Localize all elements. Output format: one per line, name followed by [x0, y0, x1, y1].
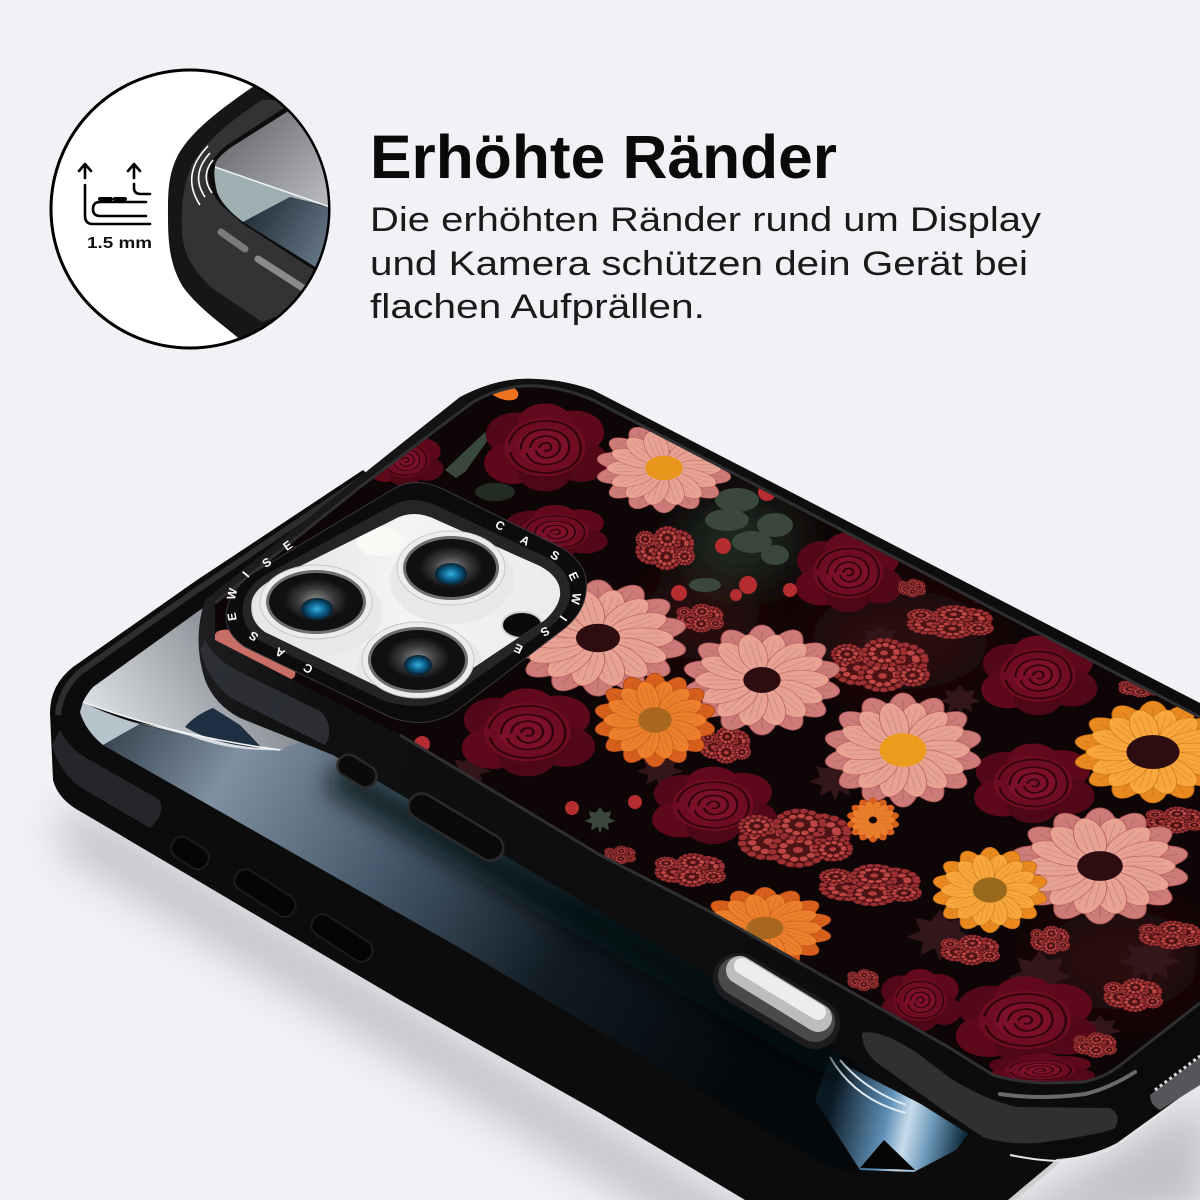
pink petals under camera	[215, 630, 296, 680]
screen dark notch	[185, 708, 262, 748]
daisy: orange left	[592, 673, 718, 767]
daisy: orange bottom	[710, 887, 832, 961]
ring brand lettering: A	[518, 532, 533, 549]
label: 1.5 mm: 1.5 mm	[87, 235, 152, 252]
ring brand lettering: S	[548, 547, 562, 564]
close-up of phone case corner	[168, 86, 328, 338]
roses	[368, 403, 1098, 1087]
daisy: yellow far right	[1072, 700, 1200, 804]
ring brand lettering: S	[538, 623, 552, 640]
description text: Die erhöhten Ränder rund um Display	[370, 201, 1042, 239]
daisy: pink left	[525, 580, 686, 696]
berry clusters	[604, 526, 1200, 1058]
bottom rim highlight	[1010, 1085, 1200, 1161]
right side reflection	[1150, 1057, 1200, 1110]
wallpaper lines and wedge	[830, 1057, 906, 1113]
ring outer	[226, 482, 586, 722]
ring brand lettering: I	[239, 569, 252, 580]
floral print	[200, 370, 1200, 1100]
side button: long two	[307, 910, 377, 966]
ring brand lettering: A	[272, 644, 287, 661]
daisy: small orange	[846, 797, 900, 843]
screen bright wallpaper	[815, 1057, 971, 1172]
camera plate details	[256, 526, 542, 686]
silver strip	[1008, 1159, 1064, 1200]
camera bump	[224, 482, 586, 722]
red berries	[414, 483, 797, 815]
charging port	[738, 966, 818, 1024]
side button: long one	[230, 865, 300, 921]
daisy: pink lower right	[1008, 807, 1192, 925]
back phone screen dark area	[103, 700, 905, 1172]
ring brand lettering: W	[568, 592, 584, 606]
shadow cast on screen by front phone	[333, 775, 840, 1065]
ring brand lettering: W	[224, 586, 241, 601]
corner carbon panel	[52, 730, 161, 828]
front phone side buttons and port	[200, 640, 818, 1024]
ground shadow	[60, 800, 1200, 1200]
ring brand lettering: C	[300, 660, 315, 677]
daisy: orange right	[930, 847, 1050, 933]
ring brand lettering: S	[246, 628, 261, 644]
description text: flachen Aufprällen.	[370, 288, 705, 326]
soft background foliage	[640, 500, 1200, 1010]
title: Erhöhte Ränder	[370, 123, 837, 191]
ring brand lettering: I	[557, 613, 570, 624]
corner reflections on case	[862, 1032, 1200, 1143]
lens left	[260, 565, 372, 639]
icon: raised edge 1.5 mm diagram	[79, 164, 152, 252]
curved white line	[83, 702, 280, 750]
front bumper inner edge highlight	[215, 386, 1200, 1083]
front phone case body	[198, 379, 1200, 1159]
description text	[370, 201, 1042, 326]
ring inner bevel	[243, 500, 570, 706]
ring brand lettering	[224, 517, 584, 677]
ring brand lettering: E	[224, 612, 240, 622]
petals at top edge	[492, 388, 518, 400]
lens right	[397, 531, 505, 605]
microphone hole	[502, 612, 542, 638]
back phone screen light area	[83, 520, 380, 750]
inset circle: raised edge close-up	[51, 70, 345, 348]
below-line light area	[80, 702, 140, 745]
back phone	[50, 470, 1057, 1200]
camera glass	[251, 514, 560, 696]
back phone bumper	[50, 470, 1057, 1200]
ring brand lettering: E	[566, 570, 582, 583]
volume button small	[333, 751, 381, 791]
flash	[356, 526, 396, 556]
glossy strip	[862, 1032, 1118, 1143]
glossy highlight	[1000, 1072, 1135, 1097]
ring brand lettering: S	[259, 555, 274, 571]
screen highlight wedge	[135, 722, 284, 750]
green leaves	[445, 432, 793, 834]
description text: und Kamera schützen dein Gerät bei	[370, 245, 1028, 283]
bumper highlight	[58, 478, 363, 715]
daisy: pink orange centre	[822, 692, 984, 808]
carbon panel near camera	[200, 640, 329, 745]
daisy: pink centre	[681, 624, 843, 736]
maroon leaves	[449, 572, 1181, 1046]
ring brand lettering: E	[512, 641, 525, 657]
volume button long	[404, 789, 508, 865]
side button: small	[167, 833, 213, 873]
ring brand lettering: E	[280, 538, 295, 554]
ring brand lettering: C	[493, 517, 508, 534]
lens bottom	[362, 622, 474, 698]
daisy: pink top	[594, 423, 734, 513]
lit speckles	[1155, 1056, 1200, 1090]
